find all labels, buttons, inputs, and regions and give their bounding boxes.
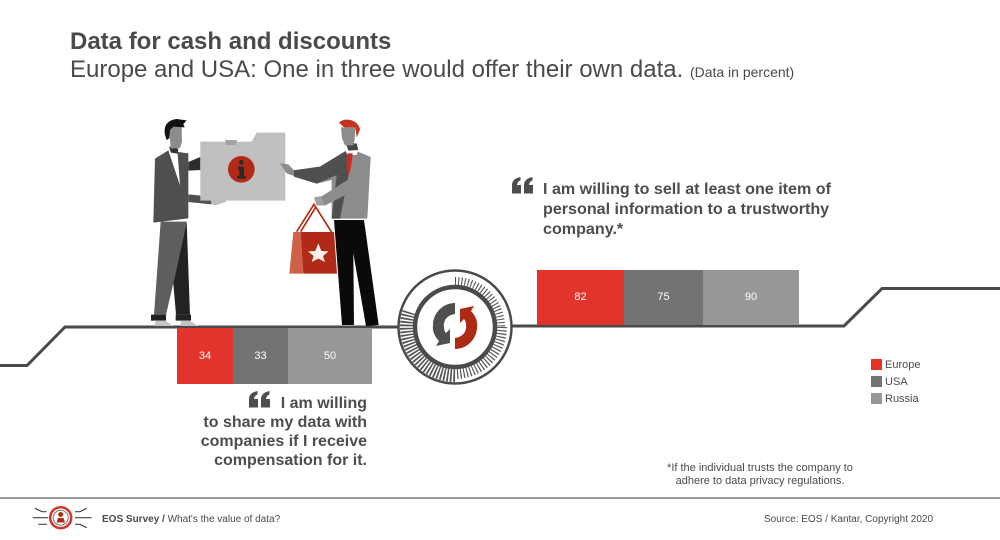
bar segment: Russia 90 bbox=[703, 270, 799, 325]
quote: willing to share bbox=[201, 391, 367, 468]
data folder with info icon bbox=[200, 133, 285, 201]
footer source: Source: EOS / Kantar, Copyright 2020 bbox=[764, 514, 933, 525]
bar segment: USA 75 bbox=[624, 270, 703, 325]
subtitle: Europe and USA: One in three would offer their own data. (Data in percent) bbox=[70, 56, 794, 83]
illustration: two businessmen exchanging data folder for shopping bag bbox=[151, 119, 379, 326]
quote text: company.* bbox=[543, 220, 623, 238]
bar segment: Europe 34 bbox=[177, 328, 233, 384]
bar segment: USA 33: 33 bbox=[254, 350, 267, 362]
footer survey label: EOS Survey / What's the value of data? bbox=[102, 514, 280, 525]
icon: EOS survey logo bbox=[32, 506, 92, 530]
bar segment: Europe 82: 82 bbox=[574, 291, 587, 303]
legend item: USA bbox=[871, 376, 908, 388]
bar segment: Europe 82 bbox=[537, 270, 624, 325]
quote text bbox=[543, 180, 831, 238]
quote: willing to sell bbox=[512, 177, 831, 238]
bar segment: Russia 50 bbox=[288, 328, 372, 384]
quote text: to share my data with bbox=[203, 414, 367, 430]
quote text: I am willing bbox=[281, 394, 367, 412]
footnote bbox=[667, 462, 853, 487]
bar segment: Russia 50: 50 bbox=[324, 350, 336, 362]
shopping bag with star bbox=[289, 204, 337, 274]
quote text: compensation for it. bbox=[214, 452, 367, 468]
refresh arrow dark bbox=[433, 303, 455, 346]
legend item: Europe: Europe bbox=[885, 359, 920, 371]
quote text: I am willing to sell at least one item of bbox=[543, 180, 831, 198]
legend item: USA: USA bbox=[885, 376, 908, 388]
bar segment: Europe 34: 34 bbox=[199, 350, 211, 362]
man right bbox=[280, 120, 379, 326]
bar segment: Russia 90: 90 bbox=[745, 291, 757, 303]
legend item: Russia: Russia bbox=[885, 393, 919, 405]
icon: cycle dial with refresh arrows bbox=[397, 269, 513, 385]
footnote: adhere to data privacy regulations. bbox=[676, 475, 844, 487]
quote text: personal information to a trustworthy bbox=[543, 200, 829, 218]
bar segment: USA 75: 75 bbox=[657, 291, 670, 303]
title: Data for cash and discounts bbox=[70, 28, 391, 55]
legend bbox=[871, 359, 920, 405]
man left bbox=[151, 119, 227, 326]
quote text bbox=[201, 394, 367, 468]
bar: selling data to trustworthy company bbox=[537, 270, 799, 325]
refresh arrow red bbox=[455, 306, 477, 349]
quote mark bbox=[249, 391, 270, 408]
bar segment: USA 33 bbox=[233, 328, 288, 384]
quote mark bbox=[512, 177, 533, 194]
footnote: *If the individual trusts the company to bbox=[667, 462, 853, 474]
bar: sharing data with compensation bbox=[177, 328, 372, 384]
footer divider bbox=[0, 497, 1000, 498]
quote text: companies if I receive bbox=[201, 432, 367, 450]
